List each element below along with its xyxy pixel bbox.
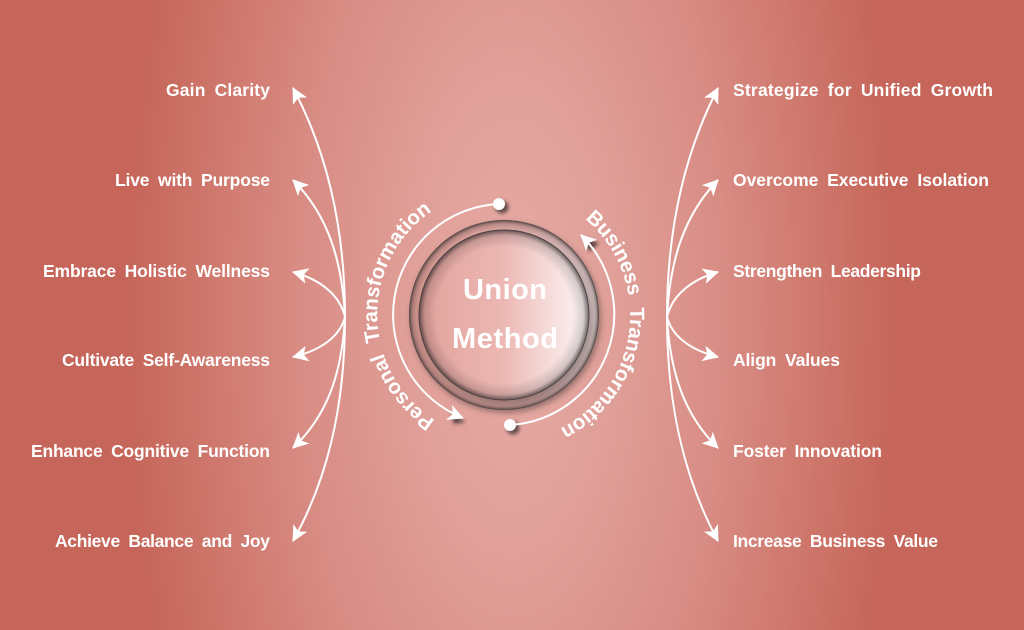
left branching arrows	[293, 88, 345, 541]
curved label: Business Transformation: Business Transformation	[561, 209, 644, 436]
center title: Union	[463, 274, 547, 306]
curved label: Personal Transformation: Personal Transformation	[364, 204, 434, 431]
right labels	[733, 80, 993, 551]
label: Strengthen Leadership: Strengthen Leadership	[733, 261, 921, 281]
left circular arrow: personal	[393, 198, 508, 424]
center disc	[418, 230, 590, 400]
label: Achieve Balance and Joy: Achieve Balance and Joy	[55, 531, 270, 551]
center title	[452, 274, 558, 355]
label: Embrace Holistic Wellness: Embrace Holistic Wellness	[43, 261, 270, 281]
left labels	[31, 80, 270, 551]
right branching arrows	[667, 88, 718, 541]
label: Overcome Executive Isolation: Overcome Executive Isolation	[733, 170, 989, 190]
center title: Method	[452, 323, 558, 355]
label: Gain Clarity: Gain Clarity	[166, 80, 270, 100]
label: Strategize for Unified Growth: Strategize for Unified Growth	[733, 80, 993, 100]
right circular arrow: business	[504, 235, 614, 434]
central rings	[409, 220, 601, 413]
label: Live with Purpose: Live with Purpose	[115, 170, 270, 190]
label: Cultivate Self-Awareness: Cultivate Self-Awareness	[62, 350, 270, 370]
label: Increase Business Value: Increase Business Value	[733, 531, 938, 551]
label: Enhance Cognitive Function: Enhance Cognitive Function	[31, 441, 270, 461]
label: Align Values: Align Values	[733, 350, 840, 370]
label: Foster Innovation: Foster Innovation	[733, 441, 882, 461]
